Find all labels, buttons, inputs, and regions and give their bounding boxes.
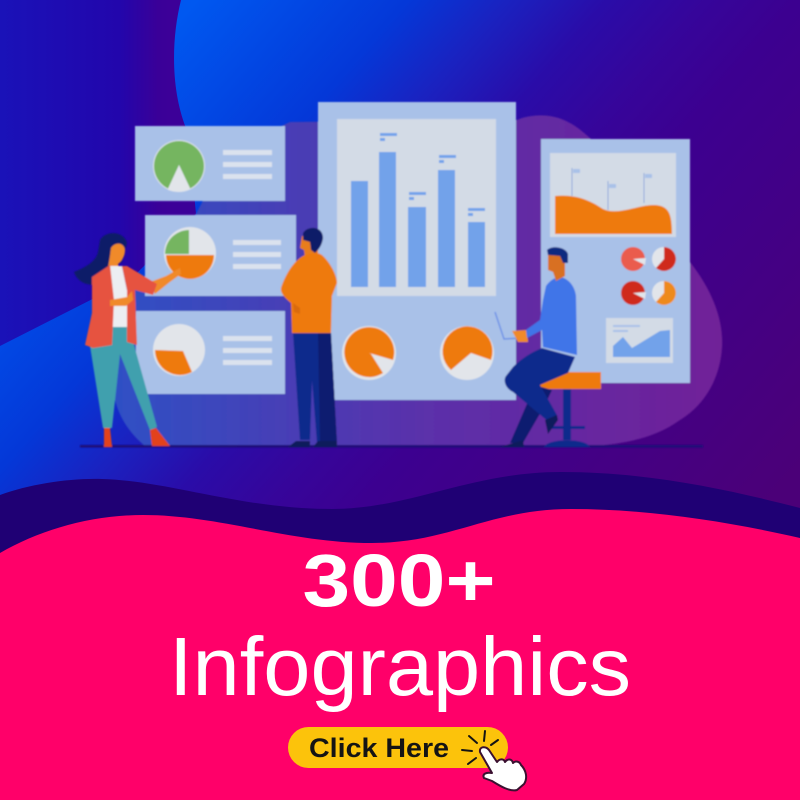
trouser shadow: [318, 333, 337, 443]
jacket: [85, 265, 157, 348]
small pie: coral: [621, 247, 646, 271]
text lines: [233, 240, 281, 269]
flag markers: [572, 168, 652, 210]
small pie: dark red: [621, 281, 646, 305]
hair: [303, 228, 323, 253]
small pie: dark red half: [652, 247, 676, 271]
small pie: orange half: [652, 281, 676, 305]
back leg: [510, 385, 552, 443]
figure: seated man: [495, 247, 577, 447]
neck and face: [300, 236, 318, 258]
hand at waist: [110, 291, 133, 306]
hand on hip: [293, 303, 300, 314]
figure: woman presenter: [74, 233, 181, 447]
mini line chart card: [606, 318, 673, 363]
panel: top left pie card: [135, 126, 285, 201]
right shoe: [150, 428, 170, 446]
heading: Infographics: Infographics: [169, 620, 631, 713]
illustration scene: [74, 102, 722, 448]
back purple shape: [113, 115, 722, 446]
heading: 300+: 300+: [302, 539, 496, 622]
dark navy wave: [0, 472, 800, 800]
shirt: [110, 266, 127, 327]
trousers: [90, 326, 157, 430]
left orange pie: [342, 326, 396, 380]
panel: lower left pie card: [136, 311, 285, 394]
shoes: [500, 415, 558, 447]
face and neck: [548, 254, 565, 281]
ground line: [80, 445, 703, 448]
face: [108, 244, 125, 268]
background left gradient: [0, 0, 800, 560]
text lines: [223, 336, 272, 365]
quarter pie chart: [164, 227, 216, 279]
pink wave: [0, 509, 800, 800]
shoes: [288, 441, 337, 447]
orange slice pie chart: [153, 324, 205, 376]
icon: click rays: [462, 731, 498, 764]
button label: Click Here: [309, 733, 449, 763]
figure: standing man: [281, 228, 337, 447]
trousers: [505, 348, 575, 423]
text lines: [223, 150, 272, 179]
left shoe: [104, 428, 112, 447]
hair: [547, 247, 568, 263]
stool: [533, 372, 601, 447]
bright blue gradient blob and sweep: [0, 0, 800, 560]
bar chart: [351, 133, 485, 287]
pointing arm: [150, 268, 181, 294]
panel: central dashboard: [318, 102, 516, 400]
trousers: [293, 333, 337, 443]
green pie chart: [153, 140, 205, 192]
panel: middle left pie card: [145, 215, 296, 296]
right orange pie: [440, 326, 494, 380]
orange area chart: [555, 196, 672, 234]
orange sweater: [281, 253, 337, 333]
panel: right dashboard: [541, 139, 690, 383]
hands: [512, 330, 528, 342]
icon: pointing hand: [480, 747, 526, 790]
button: click here: [288, 727, 526, 790]
hair: [74, 233, 127, 285]
blue sweater: [526, 277, 577, 355]
laptop: [495, 312, 523, 339]
